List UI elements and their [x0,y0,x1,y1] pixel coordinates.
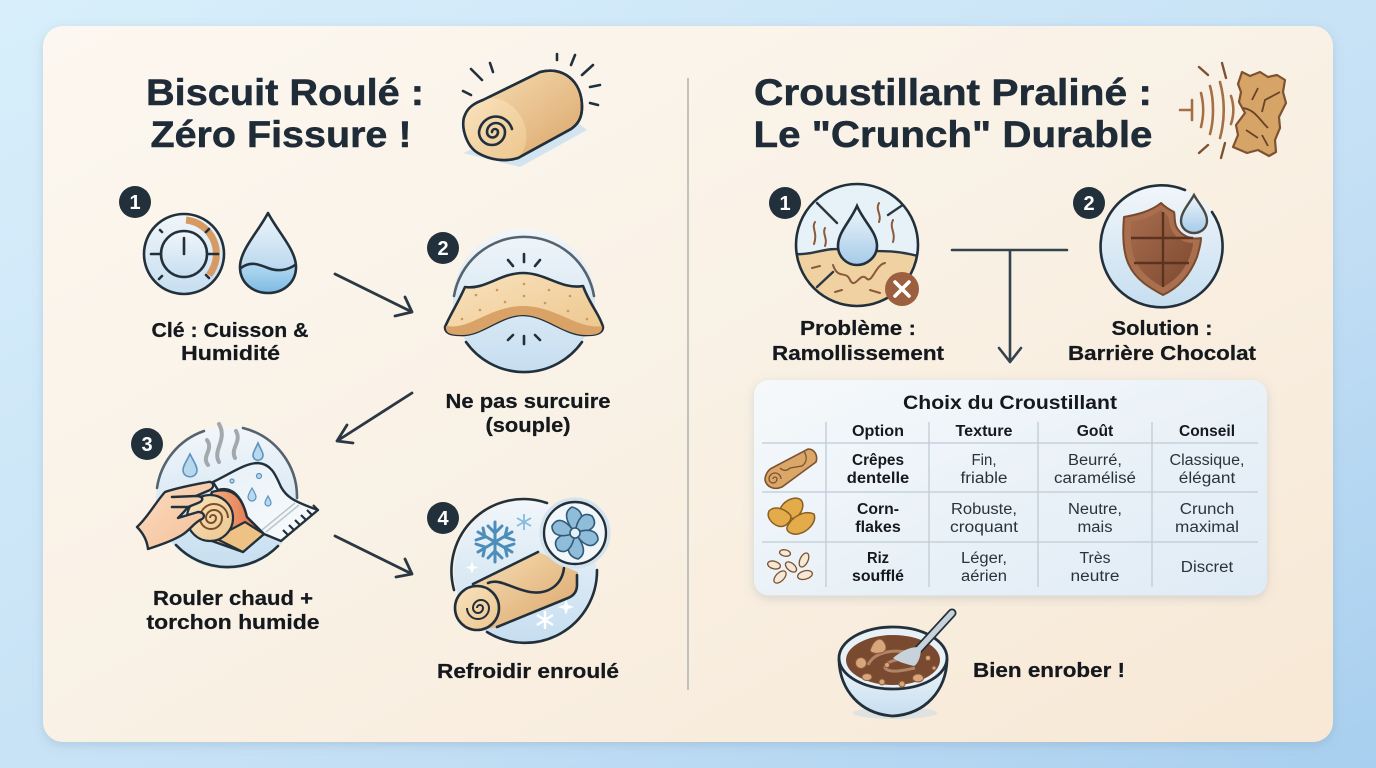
panel: table card [754,380,1267,596]
table row: riz soufflé: soufflé [852,568,904,585]
label: solution: Solution : [1112,317,1212,340]
table row: corn-flakes: Robuste, [951,501,1017,518]
table row: riz soufflé: Très [1080,550,1111,567]
table row: crêpes dentelle: Crêpes [852,452,904,469]
label: step 3: torchon humide [146,611,320,634]
heading: Croustillant Praliné: Croustillant Praliné : [754,72,1152,113]
icon: biscuit roll [463,54,600,167]
badge 4: 4 [437,508,449,530]
label: problem [772,317,944,365]
label: step 1: Humidité [181,342,280,365]
table row: riz soufflé: Léger, [961,550,1007,567]
table row: crêpes dentelle: Classique, [1170,452,1244,469]
icon: supple sponge sheet [445,229,603,372]
icon: chocolate shield [1101,185,1223,308]
heading: Biscuit Roulé: Biscuit Roulé : [146,72,424,113]
table header row: Texture [956,423,1013,440]
badge 2 [1073,187,1105,219]
table title: Choix du Croustillant [903,393,1118,414]
table row: corn-flakes [768,498,1239,536]
icon: oven dial [144,214,224,294]
table row: corn-flakes: Neutre, [1068,501,1122,518]
label: solution: Barrière Chocolat [1068,342,1256,365]
badge 2: 2 [437,238,449,260]
arrow: step 2 to 3 [337,393,412,443]
problem: softening [769,184,944,365]
icon: water drop [240,213,296,293]
step 1: dial and water drop [119,186,309,365]
badge 2: 2 [1083,193,1095,215]
icon: crunching wafer with sound waves [1180,63,1286,158]
icon: bowl of praliné with spoon [839,613,952,719]
arrow: T connector to table [952,250,1067,362]
icon: hand rolling sponge in towel [137,424,318,569]
table row: crêpes dentelle: élégant [1179,470,1236,487]
badge 1 [769,187,801,219]
table row: riz soufflé: Riz [867,550,889,567]
label: problem: Ramollissement [772,342,944,365]
arrow: step 3 to 4 [335,536,412,577]
table row: crêpes dentelle: Fin, [972,452,996,469]
table grid [762,422,1258,587]
table header row: Goût [1077,423,1113,440]
icon: drop on softened wafer [790,184,925,310]
icon: crêpe roll [765,449,817,488]
label: problem: Problème : [800,317,916,340]
label: step 1 [152,319,309,365]
arrow: step 1 to 2 [335,274,412,316]
table row: riz soufflé: Discret [1181,559,1234,576]
badge 3: 3 [141,434,153,456]
label: step 3: Rouler chaud + [153,587,313,610]
table row: crêpes dentelle: dentelle [847,470,910,487]
table row: corn-flakes: mais [1078,519,1113,536]
table row: riz soufflé: neutre [1070,568,1120,585]
table row: corn-flakes: flakes [855,519,901,536]
table row: corn-flakes: croquant [950,519,1019,536]
heading: Croustillant Praliné [754,72,1152,155]
step 3: roll while hot [131,424,320,634]
label: bien enrober: Bien enrober ! [973,659,1125,682]
table header row [852,423,1235,440]
table row: crêpes dentelle [765,449,1244,488]
label: step 2: (souple) [486,414,570,437]
label: step 1: Clé : Cuisson & [152,319,309,342]
icon: rolled sponge with fan and snow [451,499,609,643]
label: step 2 [446,390,610,437]
table row: corn-flakes: Crunch [1180,501,1234,518]
label: solution [1068,317,1256,365]
center divider [687,78,689,690]
table row: corn-flakes: Corn- [857,501,899,518]
icon: corn flakes [768,498,815,534]
heading: Biscuit Roulé: Zéro Fissure ! [150,114,412,155]
label: step 3 [146,587,320,634]
solution: chocolate barrier [1068,185,1256,365]
badge 1: 1 [129,192,141,214]
label: step 4: Refroidir enroulé [437,660,619,683]
table header row: Conseil [1179,423,1235,440]
table row: crêpes dentelle: Beurré, [1068,452,1122,469]
badge 1: 1 [779,193,791,215]
step 4: cool rolled [427,499,619,683]
table row: riz soufflé [767,549,1234,585]
step 2: supple sponge [427,229,610,437]
badge 3 [131,428,163,460]
table header row: Option [852,423,904,440]
table row: crêpes dentelle: friable [960,470,1008,487]
table row: crêpes dentelle: caramélisé [1054,470,1136,487]
badge 4 [427,502,459,534]
label: step 2: Ne pas surcuire [446,390,610,413]
icon: puffed rice [767,549,813,585]
heading: Croustillant Praliné: Le "Crunch" Durable [754,114,1152,155]
heading: Biscuit Roulé [146,72,424,155]
table row: riz soufflé: aérien [961,568,1007,585]
table row: corn-flakes: maximal [1175,519,1239,536]
badge 1 [119,186,151,218]
badge 2 [427,232,459,264]
